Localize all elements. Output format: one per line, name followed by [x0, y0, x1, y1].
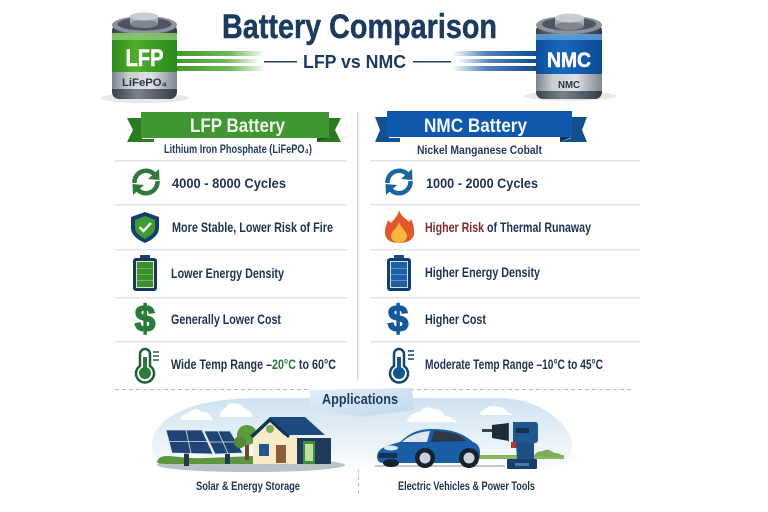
row: energy density	[387, 255, 540, 291]
icon: cycle arrows	[386, 169, 412, 195]
icon: blue dollar: $	[388, 298, 409, 339]
icon: NMC battery: NMC	[547, 49, 591, 72]
row: cost	[388, 298, 486, 339]
icon: house	[250, 417, 325, 464]
row: safety	[385, 210, 591, 243]
row: cost	[135, 298, 281, 339]
icon: flame	[385, 210, 414, 243]
icon: shield	[131, 212, 159, 243]
row: safety	[131, 212, 333, 243]
heading ribbon: LFP Battery	[127, 112, 341, 142]
heading ribbon: NMC Battery: NMC Battery	[424, 116, 527, 137]
row: cycles	[132, 169, 286, 195]
icon: LFP battery	[101, 12, 189, 103]
heading ribbon: LFP Battery: LFP Battery	[190, 116, 285, 137]
dashed separators	[115, 390, 632, 495]
panel: NMC column	[375, 111, 603, 382]
row: temperature: Wide Temp Range –20°C to 60°C	[171, 356, 336, 372]
row: cycles: 1000 - 2000 Cycles	[426, 175, 538, 191]
icon: green dollar: $	[135, 298, 156, 339]
row: energy density	[133, 255, 284, 291]
icon: car	[377, 429, 480, 468]
icon: green thermometer	[136, 349, 159, 382]
row: temperature	[390, 349, 603, 382]
icon: NMC battery	[524, 14, 616, 101]
row: cost: Generally Lower Cost	[171, 311, 281, 327]
row: cycles	[386, 169, 538, 195]
icon: green battery	[133, 255, 157, 291]
icon: LFP battery: LFP	[126, 45, 164, 72]
row: safety: More Stable, Lower Risk of Fire	[172, 219, 333, 235]
row: energy density: Higher Energy Density	[425, 264, 540, 280]
row: safety: Higher Risk of Thermal Runaway	[425, 219, 591, 235]
icon: storage unit	[297, 438, 331, 464]
panel: LFP column	[127, 112, 341, 382]
row: cycles: 4000 - 8000 Cycles	[172, 175, 286, 191]
applications tag	[309, 388, 414, 417]
header: LFP streaks	[176, 51, 266, 71]
icon: blue thermometer	[390, 349, 414, 382]
icon: solar panels	[166, 430, 243, 454]
row: temperature: Moderate Temp Range –10°C to 45°C	[425, 356, 603, 372]
row: temperature	[136, 349, 336, 382]
label: solar and energy storage: Solar & Energy Storage	[196, 481, 300, 493]
scene: solar and energy storage	[152, 398, 358, 472]
title: Battery Comparison	[222, 8, 497, 46]
subtitle: LFP vs NMC	[303, 52, 406, 72]
row: cost: Higher Cost	[425, 311, 486, 327]
icon: LFP battery: LiFePO₄	[122, 77, 167, 89]
icon: NMC battery: NMC	[558, 80, 580, 91]
NMC chemistry name: Nickel Manganese Cobalt	[417, 143, 542, 157]
scene: electric vehicles and power tools	[358, 398, 572, 470]
applications tag: Applications	[322, 391, 398, 408]
LFP chemistry name: Lithium Iron Phosphate (LiFePO₄)	[164, 142, 312, 156]
dividers	[115, 112, 640, 380]
heading ribbon: NMC Battery	[375, 111, 587, 142]
icon: power drill	[482, 422, 538, 469]
header: NMC streaks	[452, 51, 537, 71]
label: electric vehicles and power tools: Electric Vehicles & Power Tools	[398, 481, 535, 493]
icon: cycle arrows	[132, 169, 160, 195]
icon: blue battery	[387, 255, 411, 291]
row: energy density: Lower Energy Density	[171, 265, 284, 281]
